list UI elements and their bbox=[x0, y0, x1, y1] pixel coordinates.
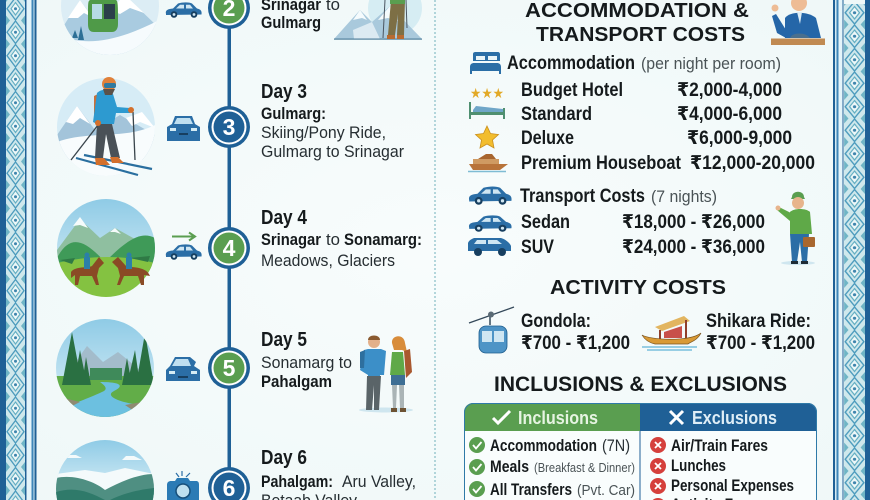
text: day 3: Day 3 bbox=[261, 81, 307, 103]
icon: transport car bbox=[468, 186, 512, 205]
row: sedan bbox=[521, 212, 765, 233]
row: SUV: SUV bbox=[521, 237, 554, 258]
heading: accommodation and transport costs: ACCOMMODATION & bbox=[525, 0, 749, 22]
inclusion: accommodation: (7N) bbox=[602, 436, 630, 455]
row: standard: ₹4,000-6,000 bbox=[677, 104, 782, 125]
text: day 4 bbox=[261, 207, 422, 270]
row: deluxe: Deluxe bbox=[521, 128, 574, 149]
row: budget hotel bbox=[521, 80, 782, 101]
row: standard bbox=[521, 104, 782, 125]
text: day 4: Day 4 bbox=[261, 207, 308, 229]
row: premium houseboat: ₹12,000-20,000 bbox=[690, 153, 815, 174]
row: sedan: ₹18,000 - ₹26,000 bbox=[622, 212, 765, 233]
text: day 5 bbox=[261, 329, 352, 391]
step marker 6 bbox=[208, 467, 250, 500]
illustration: forest and river bbox=[56, 319, 154, 417]
icon: gondola bbox=[469, 307, 514, 353]
text: shikara cost: Shikara Ride: bbox=[706, 311, 811, 332]
subheading: accommodation: Accommodation bbox=[507, 53, 635, 74]
icon: three stars: ★★★ bbox=[470, 86, 504, 102]
row: standard: Standard bbox=[521, 104, 592, 125]
row: sedan: Sedan bbox=[521, 212, 570, 233]
inclusion: transfers bbox=[469, 480, 635, 499]
row: deluxe bbox=[521, 128, 792, 149]
inclusion: meals: (Breakfast & Dinner) bbox=[534, 460, 635, 475]
heading: inclusions and exclusions: INCLUSIONS & EXCLUSIONS bbox=[494, 373, 787, 396]
inclusion: transfers: (Pvt. Car) bbox=[577, 482, 635, 499]
step marker 2 bbox=[208, 0, 250, 29]
exclusion: personal expenses bbox=[650, 476, 794, 495]
icon: car day 5 bbox=[166, 357, 200, 381]
exclusion: activity fees bbox=[650, 495, 756, 500]
heading: accommodation and transport costs bbox=[525, 0, 749, 46]
text: day 5: Sonamarg to bbox=[261, 353, 352, 372]
panel: inclusions and exclusions table bbox=[464, 403, 817, 500]
illustration: skier bbox=[57, 77, 155, 176]
step marker 3 bbox=[208, 106, 250, 148]
step marker 4 bbox=[208, 227, 250, 269]
text: day 2 bbox=[261, 0, 340, 32]
icon: car day 2 bbox=[166, 2, 202, 18]
row: premium houseboat: Premium Houseboat bbox=[521, 153, 682, 174]
exclusion: air and train fares bbox=[650, 436, 768, 455]
text: day 6: Aru Valley, bbox=[342, 472, 416, 491]
icon: sedan bbox=[468, 215, 512, 232]
text: day 3: Gulmarg to Srinagar bbox=[261, 142, 404, 161]
column divider bbox=[434, 0, 436, 500]
text: gondola cost: Gondola: bbox=[521, 311, 591, 332]
row: SUV bbox=[521, 237, 765, 258]
subheading: accommodation: (per night per room) bbox=[641, 54, 781, 73]
text: gondola cost: ₹700 - ₹1,200 bbox=[521, 333, 630, 354]
inclusion: transfers: All Transfers bbox=[490, 480, 572, 499]
text: day 6: Day 6 bbox=[261, 447, 307, 469]
text: day 3: Gulmarg: bbox=[261, 104, 326, 123]
exclusion: air and train fares: Air/Train Fares bbox=[671, 436, 768, 455]
text: gondola cost bbox=[521, 311, 630, 354]
right ornamental border bbox=[833, 0, 870, 500]
row: budget hotel: Budget Hotel bbox=[521, 80, 623, 101]
step marker 4: 4 bbox=[223, 235, 236, 261]
step marker 5 bbox=[208, 347, 250, 389]
row: premium houseboat bbox=[521, 153, 815, 174]
subheading: accommodation bbox=[507, 53, 781, 74]
row: SUV: ₹24,000 - ₹36,000 bbox=[622, 237, 765, 258]
text: shikara cost: ₹700 - ₹1,200 bbox=[706, 333, 815, 354]
illustration: meadow with horse riders bbox=[57, 199, 155, 297]
timeline line bbox=[228, 0, 231, 500]
illustration: gondola over snowy mountains bbox=[61, 0, 159, 55]
text: day 5: Day 5 bbox=[261, 329, 307, 351]
icon: SUV bbox=[468, 238, 511, 256]
text: day 4: Sonamarg: bbox=[344, 230, 422, 249]
inclusion: accommodation: Accommodation bbox=[490, 436, 597, 455]
inclusion: meals: Meals bbox=[490, 457, 529, 476]
icon: bed bbox=[470, 52, 501, 74]
row: budget hotel: ₹2,000-4,000 bbox=[677, 80, 782, 101]
icon: green bed bbox=[469, 102, 505, 119]
inclusion: meals bbox=[469, 457, 635, 476]
text: day 4: Srinagar bbox=[261, 230, 321, 249]
illustration: two backpackers bbox=[359, 336, 413, 412]
row: deluxe: ₹6,000-9,000 bbox=[687, 128, 792, 149]
text: day 3 bbox=[261, 81, 404, 161]
text: day 4: to bbox=[326, 230, 340, 249]
heading: activity costs: ACTIVITY COSTS bbox=[550, 277, 726, 299]
text: day 2: Gulmarg bbox=[261, 13, 321, 32]
icon: houseboat bbox=[468, 154, 508, 172]
text: day 6: Pahalgam: bbox=[261, 472, 333, 491]
illustration: driver bbox=[776, 192, 815, 265]
step marker 5: 5 bbox=[223, 355, 236, 381]
icon: green arrow and car day 4 bbox=[166, 232, 202, 260]
subheading: transport costs: Transport Costs bbox=[520, 186, 645, 207]
subheading: transport costs: (7 nights) bbox=[651, 187, 717, 206]
exclusion: lunches: Lunches bbox=[671, 456, 726, 475]
text: shikara cost bbox=[706, 311, 815, 354]
text: day 6 bbox=[261, 447, 416, 500]
text: day 4: Meadows, Glaciers bbox=[261, 251, 395, 270]
icon: camera day 6 bbox=[167, 471, 199, 500]
heading: accommodation and transport costs: TRANSPORT COSTS bbox=[536, 24, 745, 46]
illustration: hiker and mountains bbox=[334, 0, 422, 40]
step marker 3: 3 bbox=[223, 114, 235, 140]
text: day 5: Pahalgam bbox=[261, 372, 332, 391]
exclusion: personal expenses: Personal Expenses bbox=[671, 476, 794, 495]
illustration: Pahalgam valley bbox=[56, 440, 154, 500]
icon: car front day 3 bbox=[167, 116, 200, 141]
left ornamental border bbox=[0, 0, 36, 500]
header: exclusions: Exclusions bbox=[692, 408, 777, 428]
exclusion: lunches bbox=[650, 456, 726, 475]
icon: gold star bbox=[476, 126, 498, 148]
illustration: hotel receptionist bbox=[771, 0, 825, 45]
icon: shikara boat bbox=[642, 316, 701, 350]
text: day 3: Skiing/Pony Ride, bbox=[261, 123, 386, 142]
header: inclusions: Inclusions bbox=[518, 408, 598, 428]
